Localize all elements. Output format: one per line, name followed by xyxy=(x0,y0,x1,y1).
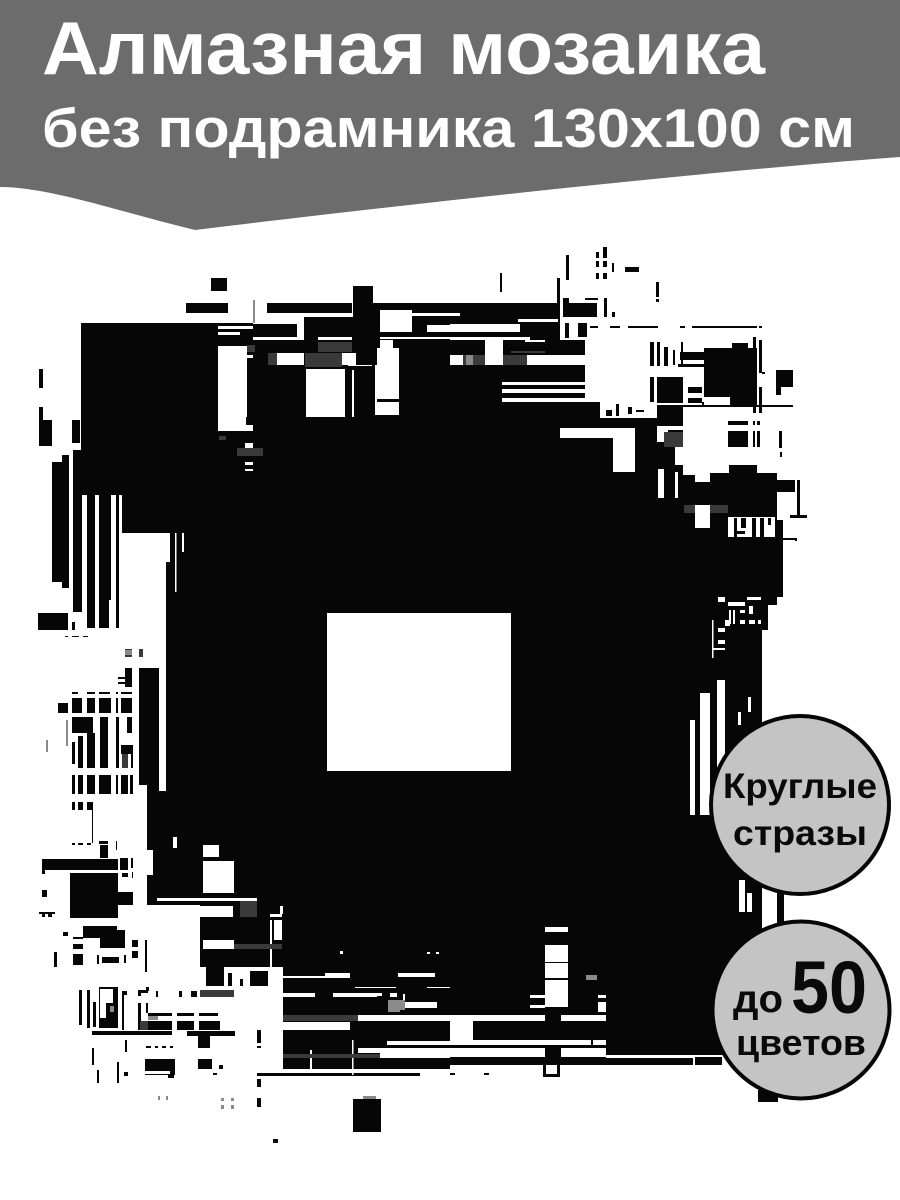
header banner xyxy=(0,0,900,230)
badge: up to 50 colours xyxy=(712,922,890,1098)
subtitle: без подрамника 130х100 см xyxy=(42,97,855,159)
badge: round rhinestones xyxy=(711,716,889,894)
badge: round rhinestones: Круглые xyxy=(723,767,877,806)
mosaic picture: abstract black and white pattern xyxy=(38,247,807,1143)
badge: up to 50 colours: 50 xyxy=(791,946,867,1029)
title: Алмазная мозаика xyxy=(42,6,766,90)
badge: up to 50 colours: цветов xyxy=(736,1022,866,1063)
badge: up to 50 colours: до xyxy=(733,978,783,1021)
badge: round rhinestones: стразы xyxy=(733,814,867,853)
